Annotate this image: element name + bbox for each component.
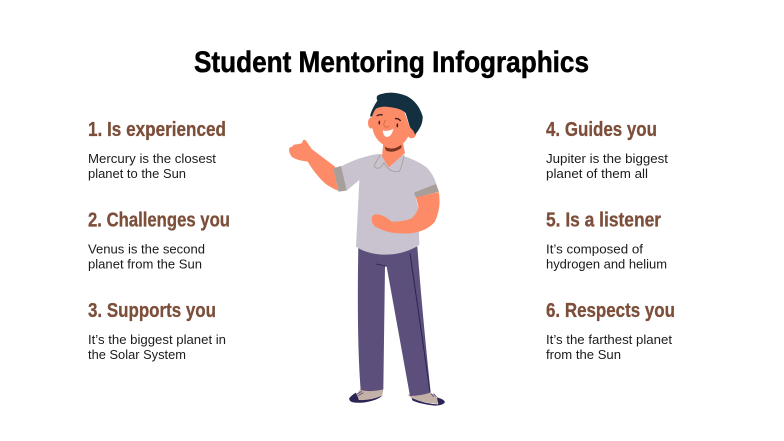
head, neck and collar — [368, 93, 423, 172]
raised arm and hand — [289, 140, 339, 191]
shirt — [333, 154, 438, 255]
panel: 1. Is experienced — [88, 119, 226, 181]
face — [372, 104, 410, 147]
panel: 6. Respects you — [546, 300, 675, 362]
right arm folded — [372, 192, 440, 233]
panel: 3. Supports you: 3. Supports you — [88, 300, 216, 322]
panel: 2. Challenges you: planet from the Sun — [88, 256, 202, 272]
panel: 6. Respects you: It’s the farthest planet — [546, 332, 672, 347]
panel: 6. Respects you: from the Sun — [546, 347, 621, 362]
nose — [384, 120, 389, 127]
panel: 1. Is experienced: 1. Is experienced — [88, 119, 226, 141]
panel: 3. Supports you: the Solar System — [88, 347, 186, 362]
ears — [368, 117, 374, 129]
torso and folded arm — [333, 154, 440, 255]
eyes and brows — [377, 115, 383, 116]
panel: 5. Is a listener — [546, 210, 667, 272]
mouth — [383, 129, 393, 137]
shoes — [349, 389, 445, 406]
panel: 5. Is a listener: 5. Is a listener — [546, 210, 661, 232]
neck — [382, 141, 405, 167]
trousers — [358, 247, 431, 396]
sleeve cuffs — [333, 166, 347, 192]
panel: 5. Is a listener: hydrogen and helium — [546, 256, 667, 272]
panel: 5. Is a listener: It’s composed of — [546, 242, 643, 256]
panel: 4. Guides you — [546, 119, 668, 181]
panel: 2. Challenges you — [88, 210, 230, 272]
panel: 3. Supports you: It’s the biggest planet in — [88, 332, 226, 347]
panel: 4. Guides you: planet of them all — [546, 166, 648, 181]
panel: 4. Guides you: Jupiter is the biggest — [546, 151, 668, 166]
panel: 2. Challenges you: Venus is the second — [88, 242, 205, 256]
panel: 3. Supports you — [88, 300, 226, 362]
panel: 2. Challenges you: 2. Challenges you — [88, 210, 230, 232]
panel: 4. Guides you: 4. Guides you — [546, 119, 657, 141]
panel: 6. Respects you: 6. Respects you — [546, 300, 675, 322]
collar — [374, 155, 404, 172]
illustration: student mentor figure — [289, 93, 445, 406]
panel: 1. Is experienced: Mercury is the closest — [88, 151, 216, 166]
title: Student Mentoring Infographics — [194, 46, 589, 79]
hair — [370, 93, 423, 135]
panel: 1. Is experienced: planet to the Sun — [88, 166, 186, 181]
